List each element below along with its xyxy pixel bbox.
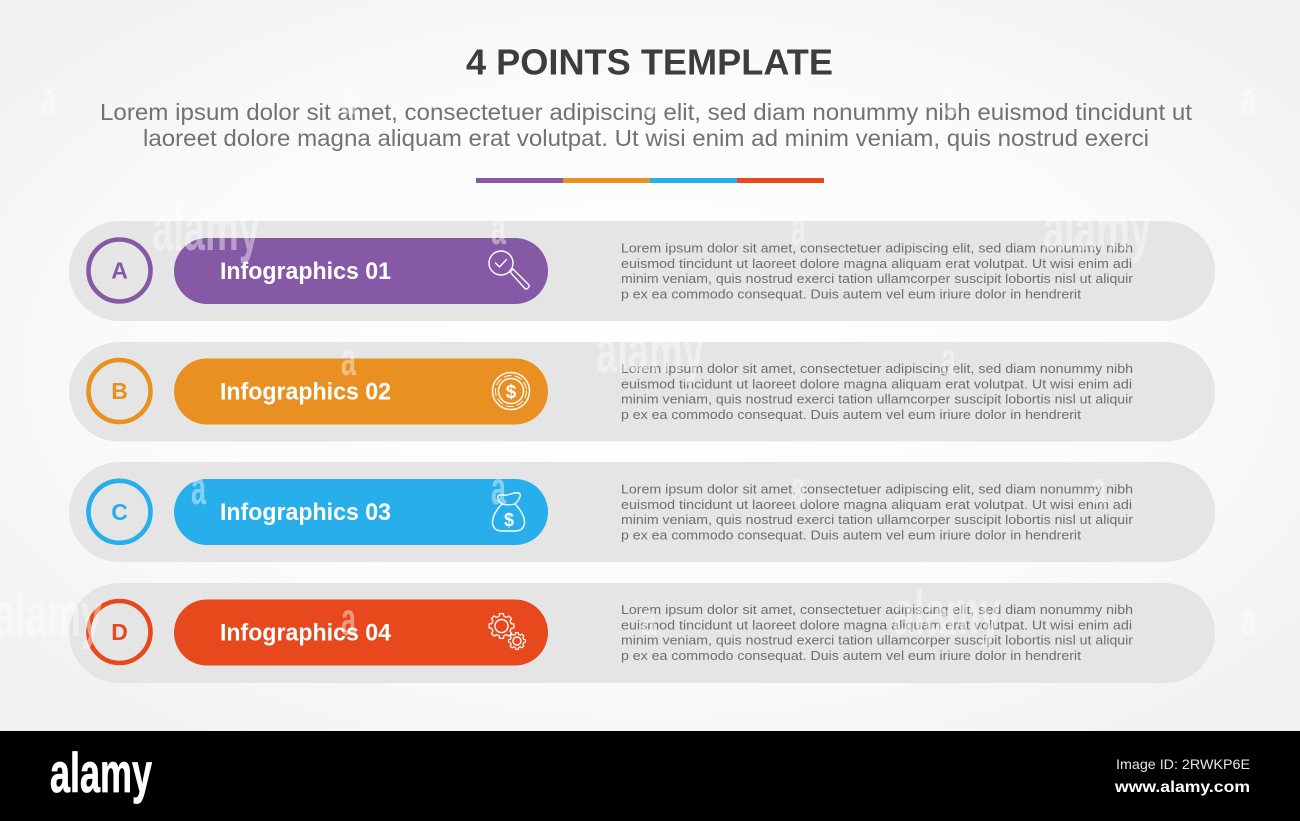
icon: gears (489, 614, 525, 649)
watermarks: a (941, 593, 956, 645)
row B description: Lorem ipsum dolor sit amet, consectetuer adipiscing elit, sed diam nonummy nibh (621, 361, 1133, 376)
row A letter badge (88, 240, 150, 302)
watermarks: a (491, 202, 506, 254)
watermarks: a (341, 593, 356, 645)
footer image id: Image ID: 2RWKP6E (1116, 756, 1250, 772)
icon: money bag: $ (504, 510, 514, 530)
row B description: euismod tincidunt ut laoreet dolore magna aliquam erat volutpat. Ut wisi enim adi (621, 376, 1132, 392)
row B description: p ex ea commodo consequat. Duis autem vel eum iriure dolor in hendrerit (621, 407, 1081, 422)
watermarks: a (41, 72, 56, 124)
row D label pill: Infographics 04 (220, 620, 392, 646)
watermarks: a (491, 462, 506, 514)
row A label pill (174, 238, 548, 304)
watermarks: a (1241, 593, 1256, 645)
watermarks: a (941, 72, 956, 124)
row B label pill: Infographics 02 (220, 378, 391, 406)
watermarks: a (341, 72, 356, 124)
watermarks: a (1241, 333, 1256, 385)
row D description: Lorem ipsum dolor sit amet, consectetuer adipiscing elit, sed diam nonummy nibh (621, 602, 1133, 617)
row A label pill: Infographics 01 (220, 258, 391, 285)
colour divider bar (476, 178, 824, 183)
row C letter badge: C (111, 499, 128, 525)
watermarks: a (41, 333, 56, 385)
row D description: p ex ea commodo consequat. Duis autem vel eum iriure dolor in hendrerit (621, 648, 1081, 663)
watermarks: a (191, 462, 206, 514)
row A background capsule (69, 221, 1215, 321)
watermarks: a (941, 333, 956, 385)
watermarks: a (791, 462, 806, 514)
subtitle text: Lorem ipsum dolor sit amet, consectetuer adipiscing elit, sed diam nonummy nibh euismod tincidunt ut (100, 99, 1193, 125)
subtitle text: laoreet dolore magna aliquam erat volutpat. Ut wisi enim ad minim veniam, quis nostrud exerci (143, 125, 1149, 151)
row C description: euismod tincidunt ut laoreet dolore magna aliquam erat volutpat. Ut wisi enim adi (621, 497, 1132, 512)
row A description: p ex ea commodo consequat. Duis autem vel eum iriure dolor in hendrerit (621, 286, 1081, 302)
watermarks: a (341, 333, 356, 385)
row D letter badge (88, 601, 150, 663)
watermarks: a (641, 593, 656, 645)
row D description (621, 602, 1134, 663)
row B label pill (174, 358, 548, 424)
watermarks: a (791, 202, 806, 254)
watermarks: a (641, 72, 656, 124)
row B description (621, 361, 1134, 422)
row C description (621, 482, 1134, 542)
icon: money bag (492, 493, 524, 531)
row C background capsule (69, 462, 1215, 562)
row A letter badge: A (111, 258, 128, 284)
row A (69, 221, 1215, 321)
watermarks: alamy (152, 195, 260, 264)
row C description: Lorem ipsum dolor sit amet, consectetuer adipiscing elit, sed diam nonummy nibh (621, 482, 1133, 496)
row D background capsule (69, 583, 1215, 683)
footer url: www.alamy.com (1114, 779, 1250, 796)
footer logo: alamy (50, 741, 152, 804)
row B letter badge: B (111, 378, 128, 404)
icon: magnifier with check (489, 251, 529, 289)
footer band (0, 731, 1300, 821)
row B description: minim veniam, quis nostrud exerci tation ullamcorper suscipit lobortis nisl ut aliquir (621, 392, 1134, 406)
row C (69, 462, 1215, 562)
row A description: euismod tincidunt ut laoreet dolore magna aliquam erat volutpat. Ut wisi enim adi (621, 256, 1132, 271)
icon: dollar coin (492, 372, 530, 410)
watermarks: alamy (596, 317, 704, 386)
row C label pill: Infographics 03 (220, 499, 391, 526)
row A description (621, 240, 1134, 302)
watermarks: alamy (1043, 195, 1151, 264)
watermarks: a (1091, 462, 1106, 514)
subtitle text (100, 99, 1193, 151)
row D description: euismod tincidunt ut laoreet dolore magna aliquam erat volutpat. Ut wisi enim adi (621, 618, 1132, 632)
row C description: p ex ea commodo consequat. Duis autem vel eum iriure dolor in hendrerit (621, 528, 1081, 542)
watermarks: a (1241, 72, 1256, 124)
row A description: minim veniam, quis nostrud exerci tation ullamcorper suscipit lobortis nisl ut aliquir (621, 271, 1134, 286)
row B background capsule (69, 342, 1215, 442)
icon: dollar coin: $ (506, 382, 517, 403)
row D description: minim veniam, quis nostrud exerci tation ullamcorper suscipit lobortis nisl ut aliquir (621, 632, 1134, 648)
watermarks: alamy (893, 579, 1001, 648)
row D label pill (174, 600, 548, 666)
row D (69, 583, 1215, 683)
row C letter badge (88, 481, 150, 543)
row B (69, 342, 1215, 442)
title: 4 POINTS TEMPLATE (466, 42, 833, 82)
row A description: Lorem ipsum dolor sit amet, consectetuer adipiscing elit, sed diam nonummy nibh (621, 240, 1133, 256)
row B letter badge (88, 360, 150, 422)
row C description: minim veniam, quis nostrud exerci tation ullamcorper suscipit lobortis nisl ut aliquir (621, 512, 1134, 527)
row D letter badge: D (111, 619, 128, 645)
row C label pill (174, 479, 548, 545)
watermarks (0, 72, 1256, 650)
